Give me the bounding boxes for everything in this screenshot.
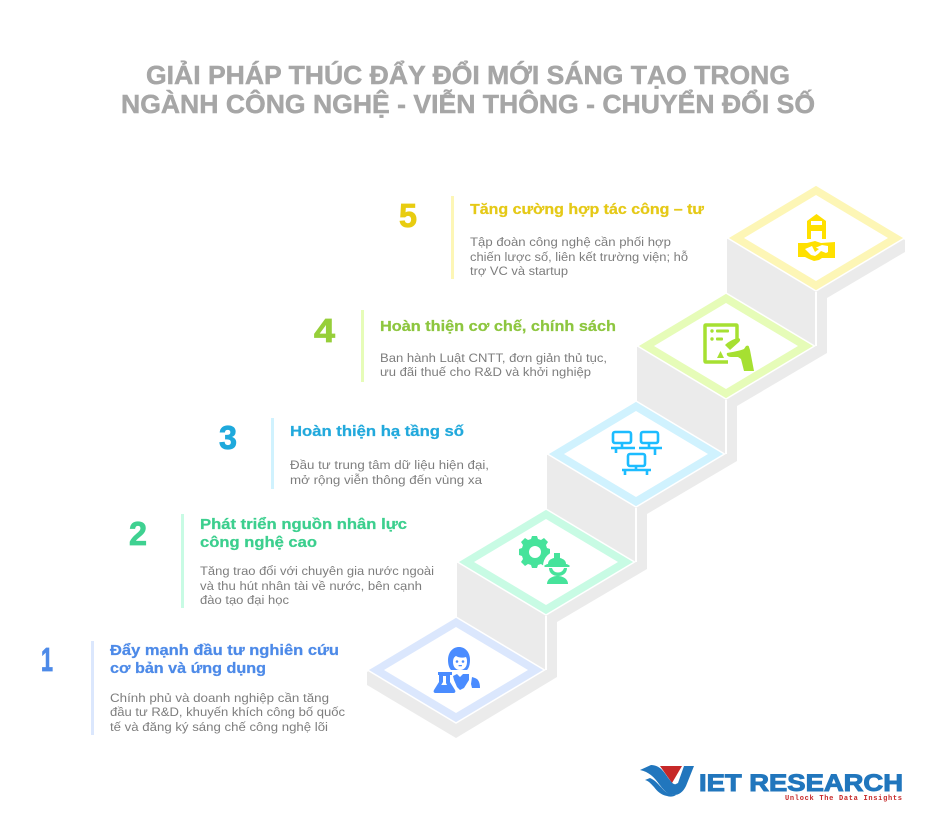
step 2 text: Phát triển nguồn nhân lực xyxy=(200,516,407,533)
step 5 text xyxy=(399,196,704,279)
step 2 text: và thu hút nhân tài về nước, bên cạnh xyxy=(200,579,422,593)
step 4 text: Ban hành Luật CNTT, đơn giản thủ tục, xyxy=(380,351,607,365)
icon: gear and engineer xyxy=(519,536,573,584)
logo: Viet Research xyxy=(640,765,903,803)
title: GIẢI PHÁP THÚC ĐẨY ĐỔI MỚI SÁNG TẠO TRONG xyxy=(146,60,790,90)
step 3 text: 3 xyxy=(219,419,237,456)
step 2 text xyxy=(129,514,434,608)
title xyxy=(121,60,815,119)
step 3 text xyxy=(219,418,489,489)
step 1 text: Đẩy mạnh đầu tư nghiên cứu xyxy=(110,642,339,659)
logo: Viet Research: IET RESEARCH xyxy=(699,770,903,797)
step 4 platform xyxy=(638,293,814,399)
step 5 text: 5 xyxy=(399,197,417,234)
step 4 text: ưu đãi thuế cho R&D và khởi nghiệp xyxy=(380,365,591,379)
step 3 text: Hoàn thiện hạ tầng số xyxy=(290,423,464,440)
step 2 text: công nghệ cao xyxy=(200,534,317,551)
step 3 text: Đầu tư trung tâm dữ liệu hiện đại, xyxy=(290,458,489,472)
logo: Viet Research: Unlock The Data Insights xyxy=(785,795,902,803)
icon: scientist with flask xyxy=(434,647,480,693)
icon: networked computers xyxy=(611,432,662,475)
step 5 text: chiến lược số, liên kết trường viện; hỗ xyxy=(470,249,688,264)
title: NGÀNH CÔNG NGHỆ - VIỄN THÔNG - CHUYỂN ĐỔI SỐ xyxy=(121,89,815,119)
step 3 text: mở rộng viễn thông đến vùng xa xyxy=(290,472,482,487)
step 2 text: đào tạo đại học xyxy=(200,593,289,607)
step 1 text: Chính phủ và doanh nghiệp cần tăng xyxy=(110,691,329,705)
step 5 text: trợ VC và startup xyxy=(470,264,568,278)
step 2 text: Tăng trao đổi với chuyên gia nước ngoài xyxy=(200,564,434,578)
step 4 text: Hoàn thiện cơ chế, chính sách xyxy=(380,318,616,335)
step 4 text xyxy=(314,310,616,382)
icon: document and hand writing xyxy=(705,325,754,371)
step 5 text: Tập đoàn công nghệ cần phối hợp xyxy=(470,235,671,249)
step 2 text: 2 xyxy=(129,515,147,552)
step 5 platform xyxy=(728,185,904,291)
step 4 text: 4 xyxy=(314,312,336,349)
icon: tower and handshake xyxy=(798,214,835,261)
step 5 text: Tăng cường hợp tác công – tư xyxy=(470,201,704,218)
step 3 platform xyxy=(548,401,724,507)
staircase graphic xyxy=(367,185,905,738)
step 1 text: cơ bản và ứng dụng xyxy=(110,660,266,677)
step 1 text: tế và đăng ký sáng chế công nghệ lõi xyxy=(110,720,328,734)
step 1 platform xyxy=(368,617,544,723)
step 2 platform xyxy=(458,509,634,615)
step 1 text: 1 xyxy=(41,641,53,678)
step 1 text: đầu tư R&D, khuyến khích công bố quốc xyxy=(110,705,345,719)
step 1 text xyxy=(41,641,345,735)
